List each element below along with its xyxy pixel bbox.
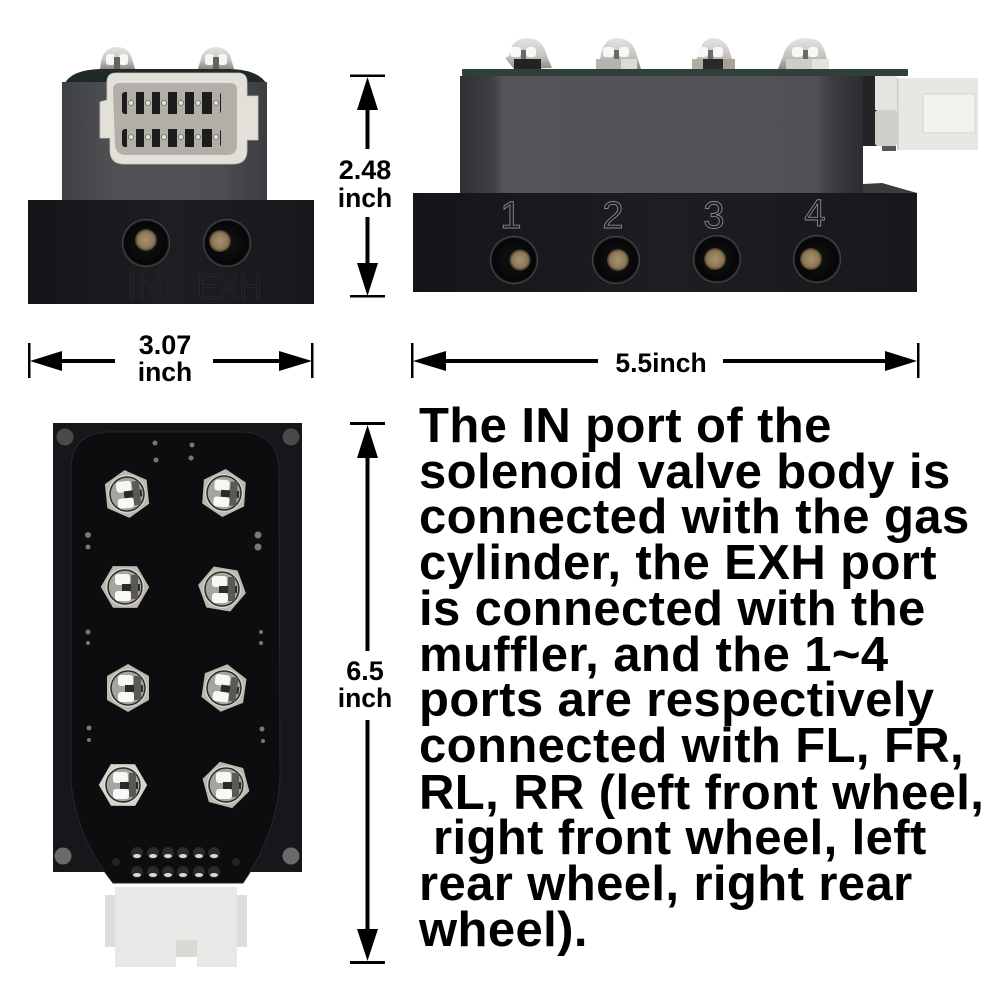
icon: bolt 3 [95,556,155,618]
label: EXH engraved: EXH [197,266,262,307]
icon: side nut 4 [778,38,829,69]
text block: port connection instructions: cylinder, the EXH port [419,536,937,590]
dimension: 6.5 inch height [338,422,392,964]
icon: bolt 2 [201,468,247,518]
front view: white connector [100,73,258,164]
icon: port 1 [489,235,539,285]
icon: bolt 8 [200,756,252,814]
side view: grey housing [460,76,863,193]
icon: corner holes [54,428,300,864]
icon: bolt 1 [104,468,150,520]
text block: port connection instructions: solenoid valve body is [419,445,951,499]
icon: side nut 3 [692,38,735,69]
text block: port connection instructions: right front wheel, left [433,811,927,865]
front view: grey housing [62,82,267,201]
dimension: 5.5 inch width [411,343,920,378]
top view: circuit board outline [71,432,280,883]
icon: port 2 [591,235,641,285]
dimension: 3.07 inch width: 3.07 [139,330,191,360]
text block: port connection instructions: muffler, and the 1~4 [419,628,889,682]
icon: EXH port [202,218,252,268]
panel: front view with IN and EXH ports [28,47,314,307]
icon: port 3 [692,234,742,284]
side view: green PCB edge [462,69,908,76]
side view: black manifold block [413,193,917,292]
icon: bolt 5 [107,664,149,712]
dimension: 3.07 inch width: inch [138,357,192,387]
icon: right top bolt [198,47,234,69]
label: IN engraved: IN [127,266,163,307]
icon: solder via clusters [85,440,265,743]
icon: IN port [121,218,171,268]
dimension: 2.48 inch height: 2.48 [339,155,391,185]
label: engraved numbers 1 to 4: 3 [703,195,725,237]
icon: bolt 8 dome [209,768,243,802]
side view: white connector [863,76,978,151]
dimension: 5.5 inch width: 5.5inch [615,348,707,378]
panel: side view with ports 1 to 4 [413,38,978,292]
text block: port connection instructions: RL, RR (left front wheel, [419,766,984,820]
icon: bolt 3 dome [108,570,142,604]
panel: top view of valve board [53,423,302,967]
icon: bolt 7 [93,754,153,816]
icon: side nut 1 [505,38,552,69]
text block: port connection instructions: wheel). [418,903,588,957]
dimension: 6.5 inch height: 6.5 [346,656,384,686]
text block: port connection instructions: connected with FL, FR, [419,719,964,773]
front view: PCB top edge [64,69,267,85]
icon: bolt 4 dome [205,572,239,606]
text block: port connection instructions: is connected with the [419,582,926,636]
text block: port connection instructions: rear wheel, right rear [419,857,913,911]
text block: port connection instructions [418,399,984,957]
label: engraved numbers 1 to 4: 2 [602,195,624,237]
label: engraved numbers 1 to 4 [500,193,826,237]
dimension: 2.48 inch height [338,74,392,298]
icon: left top bolt [100,47,135,69]
dimension: 2.48 inch height: inch [338,183,392,213]
icon: side nut 2 [596,38,641,69]
icon: bolt 6 [200,661,248,715]
label: engraved numbers 1 to 4: 1 [500,195,522,237]
icon: bolt 7 dome [106,768,140,802]
text block: port connection instructions: ports are respectively [419,673,934,727]
icon: bolt 4 [194,559,250,619]
text block: port connection instructions: The IN port of the [419,399,832,453]
side view: block top surface [863,183,917,193]
dimension: 3.07 inch width [28,330,314,387]
icon: port 4 [792,234,842,284]
top view: white connector [105,887,247,967]
text block: port connection instructions: connected with the gas [419,490,970,544]
dimension: 6.5 inch height: inch [338,683,392,713]
label: engraved numbers 1 to 4: 4 [804,193,826,235]
top view: black base plate [53,423,302,872]
front view: black manifold block [28,200,314,304]
icon: connector pin solder grid [112,847,240,878]
